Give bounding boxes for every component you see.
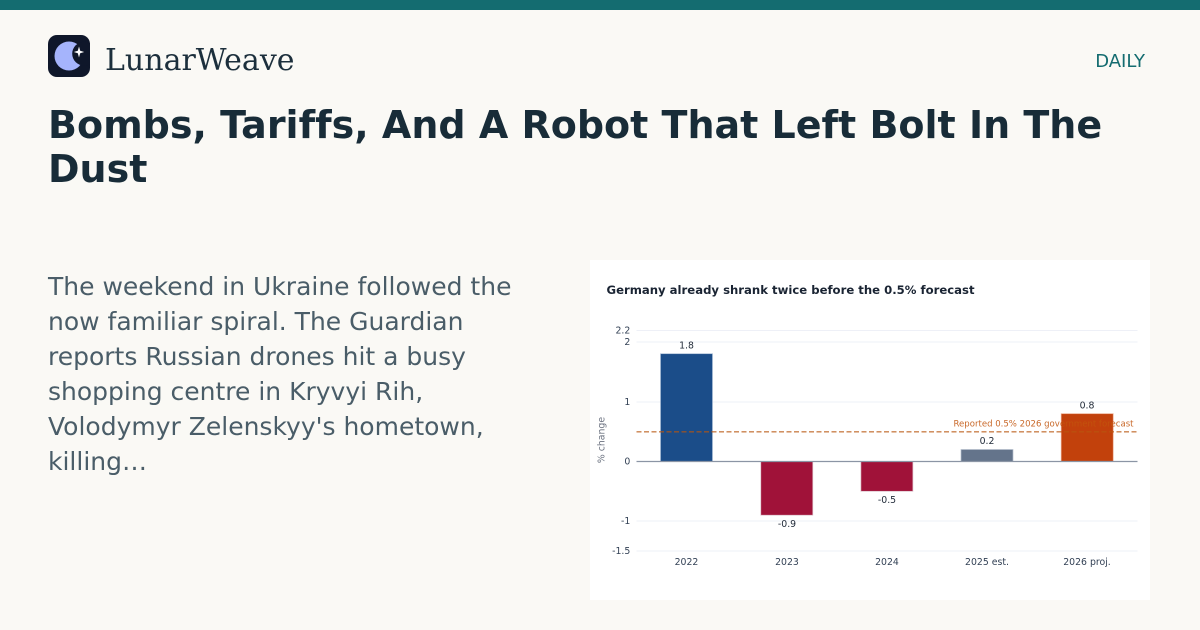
x axis labels: 2022 [675, 557, 698, 568]
bar value labels: 0.2 [980, 436, 994, 447]
bars [660, 354, 1113, 515]
y axis labels [612, 325, 630, 557]
forecast reference line [636, 431, 1138, 433]
x axis labels: 2025 est. [965, 557, 1009, 568]
summary text: shopping centre in Kryvyi Rih, [48, 377, 423, 406]
y axis labels: -1 [621, 516, 630, 527]
x axis labels [675, 557, 1111, 568]
bar value labels: -0.9 [778, 519, 796, 530]
panel: bar chart [590, 260, 1150, 600]
y axis title: % change [596, 417, 608, 463]
y axis labels: 0 [624, 456, 630, 468]
x axis labels: 2023 [775, 557, 799, 568]
summary text: Volodymyr Zelenskyy's hometown, [48, 412, 484, 441]
summary text [48, 272, 511, 476]
bar value labels [679, 340, 1094, 530]
chart title: Germany already shrank twice before the 0.5% forecast [606, 283, 975, 297]
zero line [636, 460, 1138, 462]
y axis labels: 1 [624, 397, 630, 408]
summary text: now familiar spiral. The Guardian [48, 307, 463, 336]
forecast label: Reported 0.5% 2026 government forecast [953, 420, 1134, 430]
y axis labels: 2 [624, 337, 630, 348]
summary text: The weekend in Ukraine followed the [48, 272, 511, 301]
x axis labels: 2026 proj. [1063, 557, 1111, 568]
bar value labels: -0.5 [878, 495, 896, 506]
section label: DAILY [1095, 51, 1145, 72]
y axis labels: -1.5 [612, 546, 630, 557]
x axis labels: 2024 [875, 557, 899, 568]
icon: moon logo [48, 35, 90, 77]
bar value labels: 0.8 [1080, 400, 1094, 412]
top accent bar [0, 0, 1200, 10]
brand name: LunarWeave [105, 43, 295, 78]
bar value labels: 1.8 [679, 340, 694, 352]
title: Bombs, Tariffs, And A Robot That Left Bolt In The Dust [48, 103, 1102, 191]
summary text: killing… [48, 447, 147, 476]
y axis labels: 2.2 [615, 325, 630, 336]
summary text: reports Russian drones hit a busy [48, 342, 466, 371]
